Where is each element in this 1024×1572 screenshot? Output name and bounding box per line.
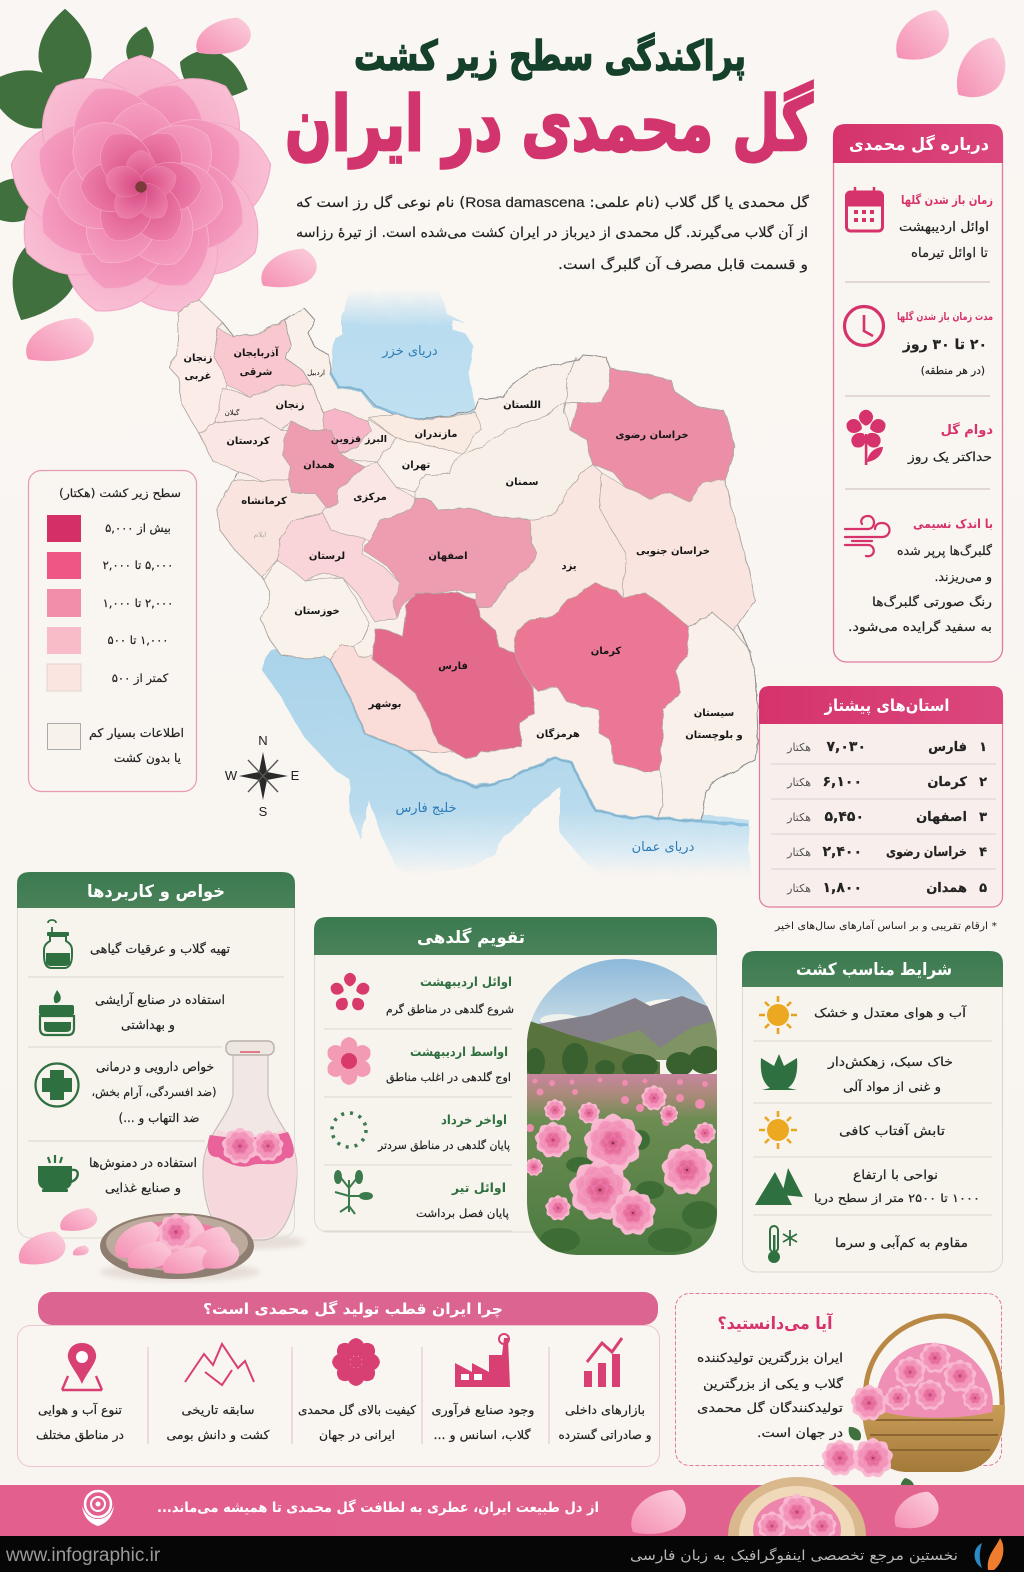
calendar entries: پایان گلدهی در مناطق سردتر — [377, 1139, 510, 1153]
calendar entries: پایان فصل برداشت — [416, 1207, 509, 1220]
province labels: غربی — [185, 371, 211, 382]
petal fall text: رنگ صورتی گلبرگ‌ها — [872, 594, 992, 610]
icon: cream jar — [39, 990, 74, 1035]
intro paragraph: گل محمدی یا گل گلاب (نام علمی: Rosa damascena) نام نوعی گل رز است که — [296, 194, 809, 211]
uses text — [89, 941, 231, 1196]
illustration: rose basket — [820, 1316, 1005, 1501]
row 4: ۲,۴۰۰ — [822, 844, 862, 860]
table footnote: * ارقام تقریبی و بر اساس آمارهای سال‌های اخیر — [774, 919, 997, 932]
body text: در جهان است. — [757, 1425, 843, 1441]
legend row 1 — [47, 515, 171, 542]
icon: medical cross — [36, 1064, 78, 1106]
land base — [170, 300, 758, 822]
conditions text: ۱۰۰۰ تا ۲۵۰۰ متر از سطح دریا — [814, 1191, 980, 1206]
icon: mountains history — [185, 1344, 254, 1385]
legend no data: اطلاعات بسیار کم — [89, 726, 184, 741]
province labels: کردستان — [226, 436, 270, 447]
coastline — [331, 373, 748, 825]
why text: کشت و دانش بومی — [166, 1428, 270, 1443]
row 5 — [786, 880, 987, 896]
bloom time text: زمان باز شدن گلها — [901, 193, 993, 207]
legend no data: یا بدون کشت — [114, 751, 181, 766]
panel: did you know — [676, 1294, 1002, 1466]
province labels: لرستان — [309, 551, 345, 562]
province labels: خراسان جنوبی — [636, 546, 710, 557]
why text: کیفیت بالای گل محمدی — [298, 1403, 416, 1417]
calendar entries: اواسط اردیبهشت — [410, 1044, 508, 1059]
heading: تقویم گلدهی — [417, 927, 525, 948]
province labels: سمنان — [506, 477, 539, 488]
icon: factory — [455, 1334, 510, 1387]
row 1: هکتار — [786, 741, 811, 754]
province: Tehran — [377, 438, 461, 492]
banner: چرا ایران قطب تولید گل محمدی است؟ — [203, 1300, 503, 1319]
legend row 4: ۱,۰۰۰ تا ۵۰۰ — [108, 633, 168, 647]
body text: تولیدکنندگان گل محمدی — [697, 1400, 844, 1416]
row 2: هکتار — [786, 776, 811, 789]
bloom lifetime text — [907, 422, 993, 465]
bloom duration text — [897, 310, 993, 377]
panel: properties and uses — [17, 872, 295, 1238]
intro paragraph: از آن گلاب می‌گیرند. گل محمدی از دیرباز در ایران کشت می‌شده است. از تیرهٔ رزاسه — [296, 224, 808, 241]
bloom lifetime text: حداکتر یک روز — [907, 449, 992, 465]
province: West Azerbaijan — [170, 300, 227, 433]
row 3: ۵,۴۵۰ — [824, 809, 864, 825]
province: Kerman — [514, 583, 689, 772]
province: East Azerbaijan — [214, 320, 312, 397]
province labels: کرمان — [591, 646, 621, 657]
why text: و صادراتی گسترده — [558, 1428, 652, 1443]
why text: گلاب، اسانس و ... — [434, 1428, 531, 1443]
compass rose: N — [258, 733, 268, 748]
map of Iran — [170, 290, 758, 875]
logo — [974, 1538, 1003, 1570]
icon: location pin — [62, 1343, 102, 1390]
row 5: همدان — [926, 881, 967, 896]
legend row 2 — [47, 552, 173, 579]
province labels: تهران — [402, 460, 431, 471]
site address: www.infographic.ir — [5, 1545, 161, 1566]
province: Isfahan — [363, 498, 537, 617]
province labels: همدان — [303, 460, 335, 471]
sea labels: دریای عمان — [632, 840, 695, 855]
province: Kordestan — [199, 418, 291, 480]
row 1: ۱ — [979, 740, 987, 755]
panel heading: درباره گل محمدی — [849, 134, 989, 155]
icon: ring of dots — [332, 1113, 366, 1147]
province labels: خوزستان — [294, 606, 340, 617]
conditions text: و غنی از مواد آلی — [843, 1079, 941, 1095]
province labels: زنجان — [183, 353, 213, 364]
bloom lifetime text: دوام گل — [941, 422, 993, 438]
province labels: شرقی — [240, 367, 273, 378]
title line 2: گل محمدی در ایران — [285, 79, 814, 169]
footer banner — [0, 1477, 1024, 1536]
province labels: و بلوچستان — [685, 730, 743, 741]
loose petal beside rose — [261, 249, 317, 287]
legend row 2: ۵,۰۰۰ تا ۲,۰۰۰ — [103, 558, 173, 572]
province: Semnan — [415, 403, 591, 520]
uses text: (ضد افسردگی، آرام بخش، — [92, 1085, 216, 1100]
why text: بازارهای داخلی — [565, 1403, 645, 1418]
calendar entries — [377, 974, 514, 1220]
sea: Persian Gulf and Oman Sea — [262, 640, 749, 875]
banner — [38, 1292, 658, 1325]
row 3: اصفهان — [916, 810, 967, 825]
province labels: هرمزگان — [536, 727, 580, 740]
conditions text: نواحی با ارتفاع — [853, 1167, 938, 1183]
intro paragraph: و قسمت قابل مصرف آن گلبرگ است. — [558, 255, 808, 273]
petal fall text: با اندک نسیمی — [913, 516, 993, 531]
bloom time text — [899, 193, 993, 261]
province labels: فارس — [438, 661, 468, 672]
row 5: ۱,۸۰۰ — [822, 880, 862, 896]
photo: rose field and mountains — [524, 959, 721, 1255]
uses text: استفاده در دمنوش‌ها — [89, 1155, 197, 1171]
province: Zanjan and surrounds — [216, 385, 325, 430]
legend row 5: کمتر از ۵۰۰ — [112, 671, 169, 686]
province labels: مرکزی — [353, 492, 387, 503]
why text: سابقه تاریخی — [182, 1403, 254, 1418]
province: South Khorasan — [599, 473, 755, 630]
heading — [314, 917, 717, 955]
table heading: استان‌های پیشتاز — [824, 696, 950, 716]
icon: sunshine — [759, 1111, 797, 1149]
bloom duration text: (در هر منطقه) — [921, 365, 985, 377]
petal fall text: گلبرگ‌ها پرپر شده — [897, 543, 992, 559]
conditions text: مقاوم به کم‌آبی و سرما — [835, 1235, 968, 1251]
compass rose: E — [291, 768, 300, 783]
provinces — [170, 300, 755, 772]
legend row 4 — [47, 627, 168, 654]
loose petal under rose — [26, 318, 94, 361]
row 2: ۶,۱۰۰ — [822, 774, 862, 790]
province labels: مازندران — [415, 429, 457, 440]
row 4 — [786, 844, 987, 860]
panel: why Iran — [18, 1292, 660, 1466]
icon: flower — [844, 410, 888, 465]
icon: soil leaves — [761, 1054, 797, 1090]
province: Markazi — [323, 462, 415, 540]
province: Mazandaran — [369, 413, 482, 453]
body text: گلاب و یکی از بزرگترین — [703, 1376, 843, 1392]
heading: شرایط مناسب کشت — [796, 960, 952, 980]
legend no data — [48, 724, 184, 766]
province labels: اصفهان — [428, 551, 468, 562]
illustration: bowl of petals — [100, 1213, 260, 1281]
heading: خواص و کاربردها — [87, 882, 225, 902]
province: Alborz — [340, 420, 396, 462]
panel: suitable growing conditions — [742, 951, 1003, 1272]
calendar entries: شروع گلدهی در مناطق گرم — [386, 1003, 514, 1017]
province: Hamedan — [281, 422, 365, 508]
why text: وجود صنایع فرآوری — [432, 1402, 534, 1418]
legend title: سطح زیر کشت (هکتار) — [59, 486, 181, 501]
conditions text: خاک سبک، زهکش‌دار — [827, 1054, 953, 1070]
panel heading — [833, 124, 1003, 163]
calendar entries: اواخر خرداد — [441, 1112, 507, 1127]
province labels: ایلام — [254, 531, 266, 539]
row 2 — [786, 774, 987, 790]
uses text: تهیه گلاب و عرقیات گیاهی — [90, 941, 231, 957]
icon: pink flower — [324, 1037, 374, 1085]
icon: sprouts — [335, 1171, 372, 1214]
loose petal top right — [896, 10, 949, 60]
province labels: البرز — [364, 434, 387, 445]
loose petal far right — [957, 38, 1005, 97]
conditions text: آب و هوای معتدل و خشک — [814, 1005, 967, 1021]
province labels: یزد — [561, 561, 577, 572]
why text: در مناطق مختلف — [36, 1428, 124, 1443]
icon: tea cup — [38, 1155, 78, 1192]
heading: آیا می‌دانستید؟ — [718, 1312, 834, 1334]
icon: wind — [845, 516, 890, 556]
body text: ایران بزرگترین تولیدکننده — [697, 1350, 843, 1366]
table heading — [759, 686, 1003, 724]
province labels: کرمانشاه — [241, 496, 287, 507]
bloom time text: تا اوائل تیرماه — [911, 246, 988, 261]
icon: rosewater bottle — [44, 920, 72, 968]
compass rose: S — [259, 804, 268, 819]
row 1: ۷,۰۳۰ — [826, 739, 866, 755]
row 5: هکتار — [786, 882, 811, 895]
calendar entries: اوائل تیر — [451, 1180, 506, 1195]
legend row 3 — [47, 589, 173, 617]
row 3: ۳ — [979, 810, 987, 825]
province labels: قزوین — [331, 434, 361, 445]
inner borders — [285, 320, 752, 818]
province: Qazvin — [323, 408, 371, 453]
province labels: بوشهر — [368, 699, 401, 710]
icon: clock — [844, 306, 884, 346]
petal fall text — [848, 516, 993, 635]
panel: top provinces table — [759, 686, 1003, 907]
sea labels — [381, 344, 695, 855]
uses text: و بهداشتی — [121, 1017, 175, 1033]
compass rose: W — [225, 768, 238, 783]
panel: bloom calendar — [314, 917, 717, 1232]
province: Bushehr — [331, 645, 461, 752]
province: Lorestan — [277, 513, 400, 622]
icon: thermometer and frost — [768, 1226, 797, 1263]
conditions text: تابش آفتاب کافی — [839, 1123, 946, 1139]
slogan: از دل طبیعت ایران، عطری به لطافت گل محمدی تا همیشه می‌ماند... — [157, 1499, 599, 1516]
row 4: خراسان رضوی — [886, 845, 967, 860]
province labels: سیستان — [694, 708, 734, 719]
tagline: نخستین مرجع تخصصی اینفوگرافیک به زبان فارسی — [630, 1547, 958, 1564]
sea labels: خلیج فارس — [395, 801, 457, 816]
illustration: rosewater bottle — [195, 1041, 305, 1249]
icon: mountains — [755, 1168, 803, 1205]
uses text: استفاده در صنایع آرایشی — [95, 992, 225, 1008]
calendar entries: اوائل اردیبهشت — [420, 974, 512, 989]
row 2: ۲ — [979, 775, 987, 790]
uses text: خواص دارویی و درمانی — [96, 1059, 214, 1075]
legend row 5 — [47, 664, 169, 691]
why text — [36, 1402, 652, 1443]
province labels: اللستان — [503, 400, 541, 411]
legend row 1: بیش از ۵,۰۰۰ — [105, 521, 171, 536]
heading — [742, 951, 1003, 987]
province: Kermanshah — [218, 480, 327, 577]
sea: Caspian — [331, 290, 478, 422]
hero rose with leaves — [0, 9, 282, 334]
province labels: آذربایجان — [233, 346, 279, 359]
petal fall text: به سفید گرایده می‌شود. — [848, 619, 992, 635]
petal fall text: و می‌ریزند. — [934, 569, 992, 585]
row 4: هکتار — [786, 846, 811, 859]
row 4: ۴ — [979, 845, 987, 860]
heading — [17, 872, 295, 908]
intro paragraph — [296, 194, 809, 273]
province: Khorasan Razavi — [570, 368, 734, 502]
province: Fars — [373, 592, 534, 758]
conditions text — [814, 1005, 980, 1251]
why text: ایرانی در جهان — [319, 1428, 395, 1443]
decorative petals and bowl — [631, 1477, 939, 1536]
legend row 3: ۲,۰۰۰ تا ۱,۰۰۰ — [103, 596, 173, 610]
why text: تنوع آب و هوایی — [38, 1402, 122, 1418]
compass rose — [225, 733, 300, 819]
row 3 — [786, 809, 987, 825]
icon: calendar — [846, 187, 883, 231]
bottom credit bar — [0, 1536, 1024, 1572]
icon: quality flower — [332, 1338, 380, 1386]
calendar entries: اوج گلدهی در اغلب مناطق — [386, 1071, 511, 1085]
province labels — [183, 346, 743, 741]
bloom duration text: مدت زمان باز شدن گلها — [897, 310, 993, 323]
icon: red flower — [329, 973, 371, 1013]
body text — [697, 1350, 844, 1441]
title — [285, 32, 814, 169]
legend panel — [28, 470, 196, 792]
icon: growth chart — [584, 1338, 622, 1387]
loose petals near bowl — [19, 1208, 97, 1264]
row 5: ۵ — [979, 881, 987, 896]
icon: white rose — [82, 1491, 114, 1526]
row 1 — [786, 739, 987, 755]
icon: sun and climate — [759, 996, 797, 1034]
province labels: اردبیل — [307, 369, 325, 377]
uses text: ضد التهاب و ...) — [119, 1111, 199, 1126]
province: Khuzestan — [262, 560, 369, 660]
uses text: و صنایع غذایی — [105, 1180, 181, 1196]
loose petal top centre — [196, 18, 251, 54]
bloom duration text: ۲۰ تا ۳۰ روز — [902, 337, 987, 353]
row 1: فارس — [928, 740, 967, 755]
bloom time text: اوائل اردیبهشت — [899, 220, 989, 235]
panel: about the damask rose — [833, 124, 1003, 662]
row 2: کرمان — [927, 775, 967, 790]
sea labels: دریای خزر — [381, 344, 438, 359]
province labels: گیلان — [225, 408, 240, 417]
title line 1: پراکندگی سطح زیر کشت — [354, 32, 746, 81]
row 3: هکتار — [786, 811, 811, 824]
province: Yazd — [476, 463, 625, 652]
province labels: زنجان — [275, 400, 305, 411]
province labels: خراسان رضوی — [615, 430, 689, 441]
